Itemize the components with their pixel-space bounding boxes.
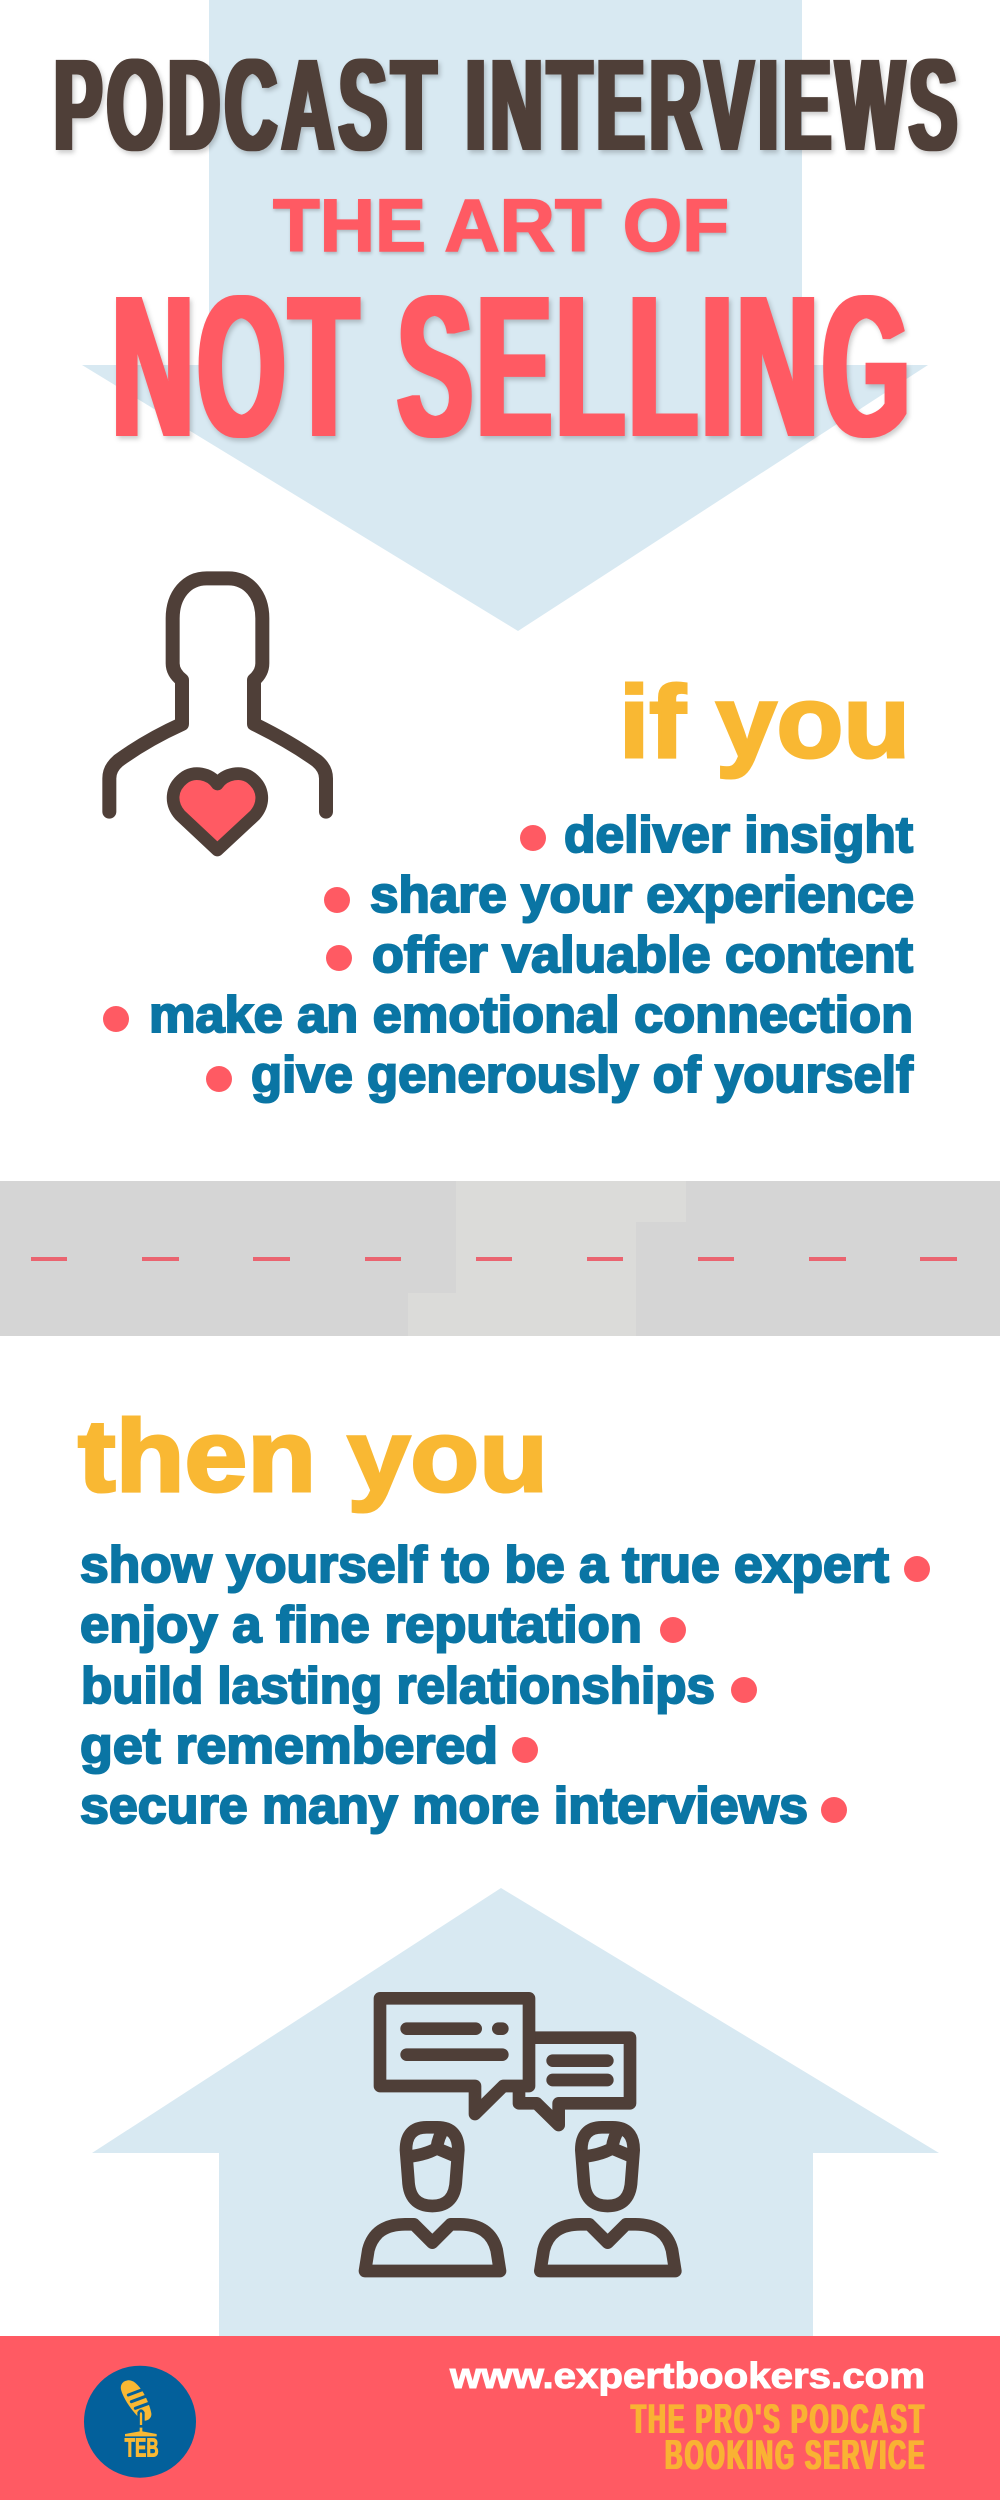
arrow: pointing up bbox=[92, 1888, 939, 2336]
title: not selling: NOT SELLING bbox=[112, 253, 910, 479]
list item: offer valuable content: offer valuable content bbox=[372, 926, 913, 983]
list: then you items bbox=[80, 1536, 930, 1834]
footer band bbox=[0, 2336, 1000, 2500]
title: podcast interviews: PODCAST INTERVIEWS bbox=[54, 32, 957, 179]
list: if you items bbox=[103, 806, 914, 1103]
arrow: pointing down bbox=[82, 0, 928, 631]
list item: secure many more interviews: secure many more interviews bbox=[80, 1777, 808, 1834]
list item: get remembered: get remembered bbox=[80, 1717, 498, 1774]
footer tagline: THE PRO'S PODCAST bbox=[631, 2396, 924, 2443]
list item: deliver insight: deliver insight bbox=[564, 806, 913, 863]
icon: two people in conversation bbox=[365, 1998, 675, 2271]
footer url: www.expertbookers.com bbox=[449, 2355, 925, 2396]
list item: enjoy a fine reputation: enjoy a fine reputation bbox=[80, 1596, 642, 1653]
list item: build lasting relationships: build lasting relationships bbox=[81, 1657, 715, 1714]
list item: make an emotional connection: make an emotional connection bbox=[149, 986, 913, 1043]
icon: person with heart bbox=[109, 578, 326, 850]
divider band: grey road with dashes bbox=[0, 1181, 1000, 1336]
list item: share your experience: share your experience bbox=[370, 866, 914, 923]
list item: show yourself to be a true expert: show yourself to be a true expert bbox=[80, 1536, 889, 1593]
logo: TEB microphone badge: TEB bbox=[125, 2433, 159, 2463]
list item: give generously of yourself: give generously of yourself bbox=[251, 1046, 914, 1103]
footer tagline: BOOKING SERVICE bbox=[665, 2432, 924, 2479]
heading: then you: then you bbox=[78, 1399, 548, 1513]
footer tagline bbox=[631, 2396, 924, 2479]
subtitle: the art of: THE ART OF bbox=[273, 184, 729, 267]
logo: TEB microphone badge bbox=[84, 2366, 196, 2478]
heading: if you: if you bbox=[619, 665, 910, 779]
